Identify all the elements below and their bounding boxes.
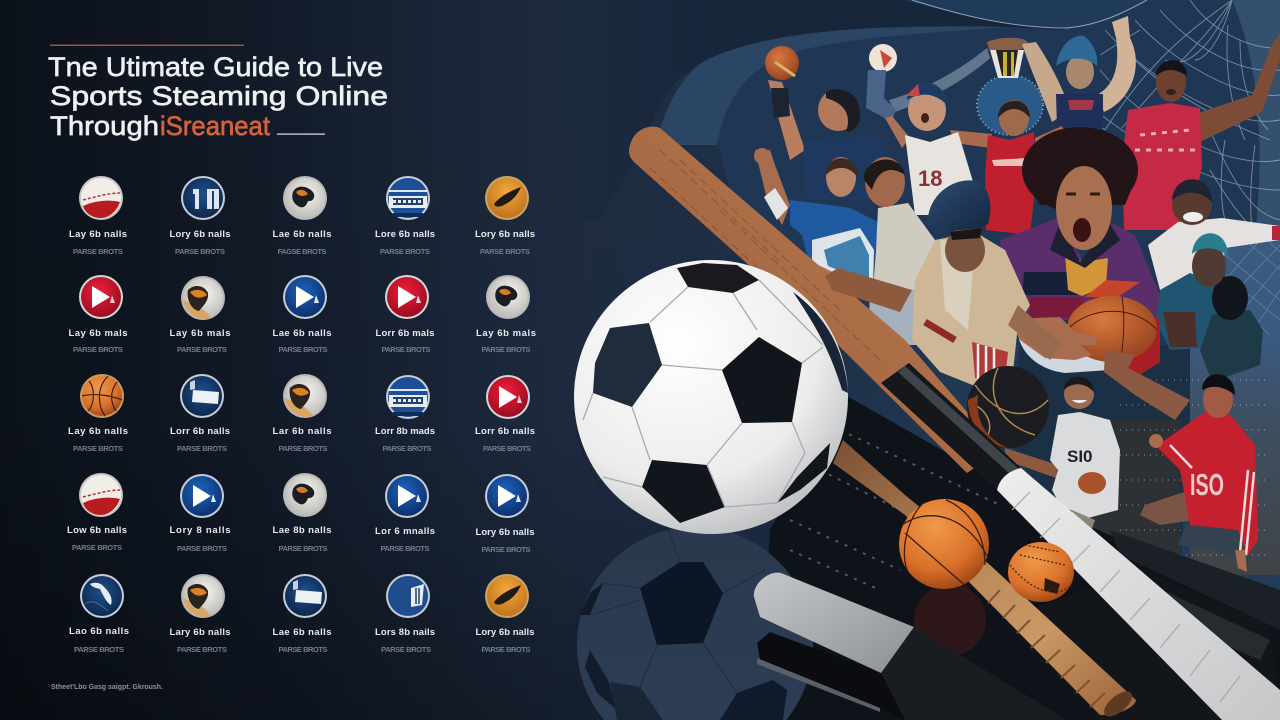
row 2 item 5: PARSE BROTS [482,345,530,354]
row 5 item 3: Lae 6b nalls [272,627,332,638]
row 2 item 1: Lay 6b mals [68,328,128,339]
row 2 item 4 [376,275,434,354]
row 5 item 3 [272,574,332,654]
row 4 item 3: PARSE BROTS [278,544,328,553]
row 3 item 4 [375,375,435,453]
player: teal haired woman and dark figure [1155,233,1263,382]
row 3 item 2: PARSE BROTS [177,444,227,453]
row 1 item 5: PARSE BROTS [480,247,530,256]
row 3 item 1: PARSE BROTS [73,444,123,453]
row 3 item 5 [475,375,535,453]
player: old man in beige with helmet [825,180,1062,400]
goal net lines [1060,0,1280,245]
row 4 item 4: Lor 6 mnalls [375,526,435,537]
trophy stadium model [812,228,874,295]
basketball small [1008,542,1074,602]
row 2 item 3: PARSE BROTS [278,345,328,354]
row 2 item 3: Lae 6b nalls [272,328,332,339]
row 4 item 3: Lae 8b nalls [272,525,332,536]
row 4 item 1: Low 6b nalls [67,525,127,536]
row 5 item 5: PARSE BROTS [482,645,530,654]
keyboard and laptop [760,395,1280,720]
row 1 item 4 [375,176,435,256]
row 5 item 2 [170,574,230,654]
row 2 item 3 [272,275,332,354]
row 5 item 5: Lory 6b nalls [476,627,534,638]
row 5 item 2: Lary 6b nalls [170,627,230,638]
row 1 item 3: FAGSE BROTS [278,247,326,256]
player: boy in white jersey 18 [866,44,974,215]
row 1 item 2: PARSE BROTS [175,247,225,256]
row 4 item 5: PARSE BROTS [482,545,530,554]
baseball bat: white grip [997,468,1280,720]
baseball bat: black sleeve [881,363,1021,490]
row 5 item 1 [69,574,129,654]
row 5 item 1: Lao 6b nalls [69,626,129,637]
dark leather ball [967,366,1049,448]
row 1 item 4: PARSE BROTS [380,247,430,256]
player: woman in red [950,100,1066,235]
player: kid in white uniform [1005,377,1120,540]
player: man in red jersey [1122,33,1280,230]
soccer ball [574,260,848,534]
row 2 item 4: Lorr 6b mals [376,328,434,339]
title accent line [50,44,244,46]
footer note: Stheet'Lbo Gasg saigpt. Gkroush. [51,682,163,691]
row 3 item 2: Lorr 6b nalls [170,426,230,437]
row 4 item 5 [476,474,534,554]
silver and black bat [754,573,1067,720]
basketball large [899,499,989,589]
row 4 item 2: Lory 8 nalls [170,525,230,536]
row 5 item 4: Lors 8b nails [375,627,435,638]
baseball bat: wood barrel [629,127,1000,473]
row 3 item 1 [68,374,128,453]
title: Through [50,111,159,141]
row 2 item 2: Lay 6b mals [170,328,230,339]
title: Sports Steaming Online [50,81,388,111]
row 2 item 1 [68,275,128,354]
row 2 item 5: Lay 6b mals [476,328,536,339]
row 3 item 4: PARSE BROTS [382,444,432,453]
row 1 item 3: Lae 6b nalls [272,229,332,240]
player: man in red jacket: ISO [1190,467,1224,502]
row 1 item 5 [475,176,535,256]
player: man throwing ball [765,46,886,200]
ball panels [576,263,848,523]
player: boy in white jersey 18: 18 [918,166,942,191]
row 1 item 5: Lory 6b nalls [475,229,535,240]
row 1 item 1 [69,176,127,256]
splash backdrop behind lower players [1010,340,1280,575]
row 2 item 2 [170,276,230,354]
player: woman in white jersey [1148,179,1280,290]
row 5 item 5 [476,574,534,654]
player: man in red jacket [1140,374,1258,572]
background swooshes [540,0,1280,345]
row 3 item 3 [272,374,332,453]
row 2 item 2: PARSE BROTS [177,345,227,354]
soccer ball reflection [577,527,986,720]
row 1 item 2 [170,176,230,256]
row 3 item 1: Lay 6b nalls [68,426,128,437]
row 1 item 3 [272,176,332,256]
row 5 item 2: PARSE BROTS [177,645,227,654]
chain-link fence [1225,238,1280,345]
row 3 item 3: PARSE BROTS [278,444,328,453]
row 1 item 1: Lay 6b nalls [69,229,127,240]
row 3 item 3: Lar 6b nalls [272,426,332,437]
row 1 item 2: Lory 6b nalls [170,229,230,240]
row 4 item 2: PARSE BROTS [177,544,227,553]
row 3 item 5: Lorr 6b nalls [475,426,535,437]
ball seams [583,280,823,507]
row 3 item 5: PARSE BROTS [483,444,531,453]
player: kid in white uniform: SI0 [1067,447,1093,466]
row 5 item 4: PARSE BROTS [381,645,431,654]
row 4 item 1 [67,473,127,552]
row 5 item 3: PARSE BROTS [278,645,328,654]
title: Tne Utimate Guide to Live [48,52,383,82]
row 5 item 4 [375,574,435,654]
row 4 item 2 [170,474,230,553]
player: arms-up fan with blue hat [977,16,1136,135]
row 3 item 4: Lorr 8b mads [375,426,435,437]
row 3 item 2 [170,374,230,453]
player: afro man with basketball [1000,127,1190,420]
title [48,52,388,141]
row 2 item 5 [476,275,536,354]
row 4 item 5: Lory 6b nalls [476,527,534,538]
row 2 item 1: PARSE BROTS [73,345,123,354]
row 4 item 4: PARSE BROTS [380,544,430,553]
row 5 item 1: PARSE BROTS [74,645,124,654]
tan baseball bat [833,440,1136,720]
row 1 item 4: Lore 6b nalls [375,229,435,240]
row 4 item 1: PARSE BROTS [72,543,122,552]
title: iSreaneat [160,111,270,141]
title trailing line [277,134,325,135]
row 4 item 3 [272,473,332,553]
player: man in off-white shirt [864,157,935,345]
row 1 item 1: PARSE BROTS [73,247,123,256]
row 2 item 4: PARSE BROTS [382,345,430,354]
player: woman in blue shirt [754,148,878,285]
row 4 item 4 [375,474,435,553]
